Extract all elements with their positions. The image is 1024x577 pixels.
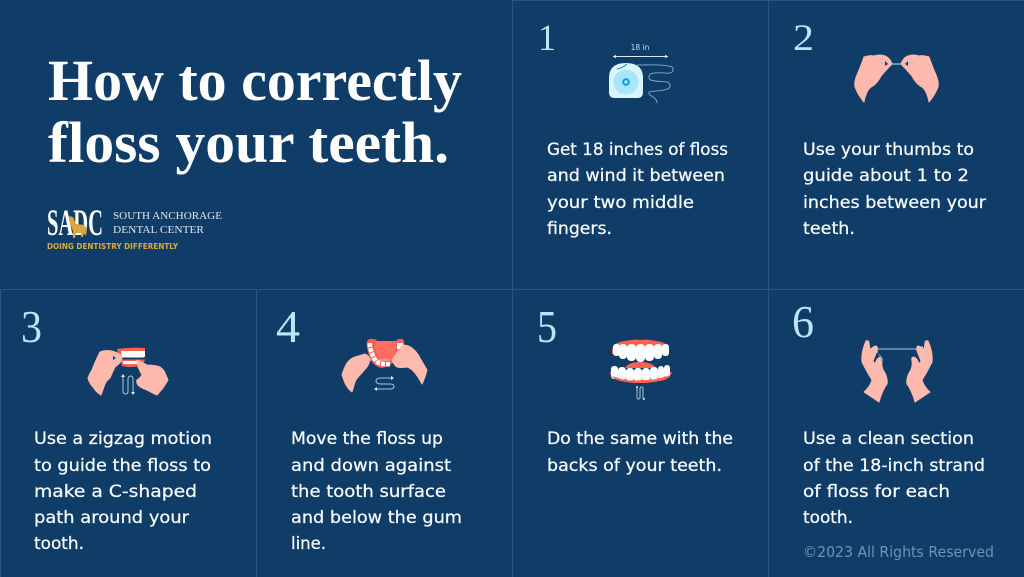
- text: Move the floss up: [291, 429, 443, 448]
- text: path around your: [34, 508, 189, 527]
- text: tooth.: [803, 508, 853, 527]
- text: Use your thumbs to: [803, 140, 974, 159]
- text: [547, 429, 733, 475]
- text: and wind it between: [547, 166, 725, 185]
- logo: [47, 203, 222, 251]
- number 3: 3: [21, 301, 42, 352]
- text: [547, 140, 728, 238]
- text: Use a clean section: [803, 429, 974, 448]
- text: line.: [291, 534, 326, 553]
- title: [48, 48, 462, 175]
- panel: step 1: [538, 18, 728, 238]
- panel: step 5: [537, 301, 733, 475]
- copyright: ©2023 All Rights Reserved: [803, 543, 994, 561]
- text: [34, 429, 212, 553]
- text: fingers.: [547, 219, 612, 238]
- text: your two middle: [547, 193, 694, 212]
- icon: floss dispenser: 18 in: [631, 43, 650, 52]
- panel: step 2: [793, 18, 986, 238]
- icon: open teeth: [610, 340, 672, 400]
- text: [291, 429, 462, 553]
- logo name: [113, 210, 222, 236]
- text: teeth.: [803, 219, 855, 238]
- panel: step 4: [276, 301, 462, 553]
- panel: step 6: [792, 296, 994, 561]
- tagline: DOING DENTISTRY DIFFERENTLY: [47, 242, 178, 251]
- number 2: 2: [793, 18, 814, 59]
- icon: hands stretching floss: [862, 341, 932, 402]
- text: of the 18-inch strand: [803, 456, 985, 475]
- text: make a C-shaped: [34, 482, 197, 501]
- text: backs of your teeth.: [547, 456, 722, 475]
- logo mark: SADC: [47, 203, 103, 244]
- number 5: 5: [537, 301, 557, 352]
- text: tooth.: [34, 534, 84, 553]
- text: Do the same with the: [547, 429, 733, 448]
- logo name: DENTAL CENTER: [113, 224, 205, 236]
- text: the tooth surface: [291, 482, 446, 501]
- number 1: 1: [538, 18, 556, 59]
- title: floss your teeth.: [48, 110, 449, 175]
- text: and below the gum: [291, 508, 462, 527]
- text: guide about 1 to 2: [803, 166, 969, 185]
- text: Use a zigzag motion: [34, 429, 212, 448]
- logo mark: [47, 203, 103, 244]
- icon: hands flossing front teeth: [88, 348, 168, 395]
- number 6: 6: [792, 296, 814, 347]
- text: [803, 429, 985, 527]
- text: [803, 140, 986, 238]
- text: inches between your: [803, 193, 986, 212]
- logo name: SOUTH ANCHORAGE: [113, 210, 222, 222]
- number 4: 4: [276, 301, 300, 352]
- title: How to correctly: [48, 48, 462, 113]
- text: Get 18 inches of floss: [547, 140, 728, 159]
- icon: hands holding floss: [855, 55, 938, 102]
- text: to guide the floss to: [34, 456, 211, 475]
- panel: step 3: [21, 301, 212, 553]
- text: of floss for each: [803, 482, 950, 501]
- icon: floss dispenser: [609, 43, 673, 103]
- text: and down against: [291, 456, 452, 475]
- icon: hands flossing lower jaw: [342, 339, 427, 392]
